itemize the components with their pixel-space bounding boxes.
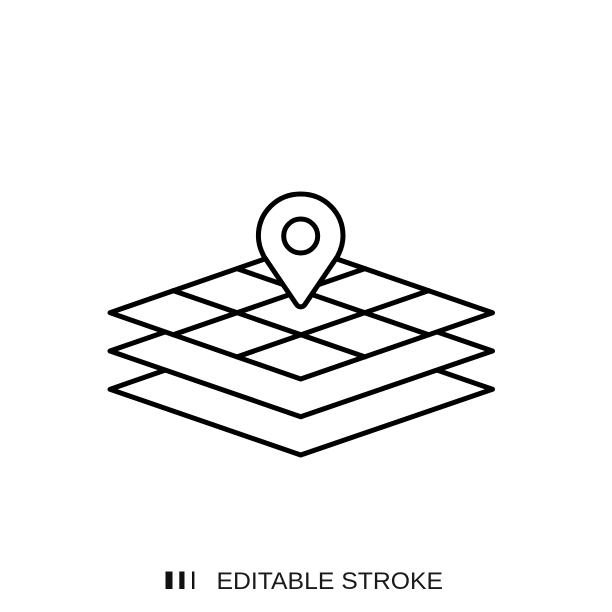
middle map layer (110, 285, 492, 417)
top map layer with grid (110, 246, 492, 379)
label text: EDITABLE STROKE (216, 568, 443, 595)
icon: stroke weight bars (166, 572, 194, 589)
icon: layered map with location pin (110, 194, 492, 455)
location pin (258, 194, 343, 307)
badge: editable stroke (166, 568, 443, 595)
bottom map layer (110, 323, 492, 455)
